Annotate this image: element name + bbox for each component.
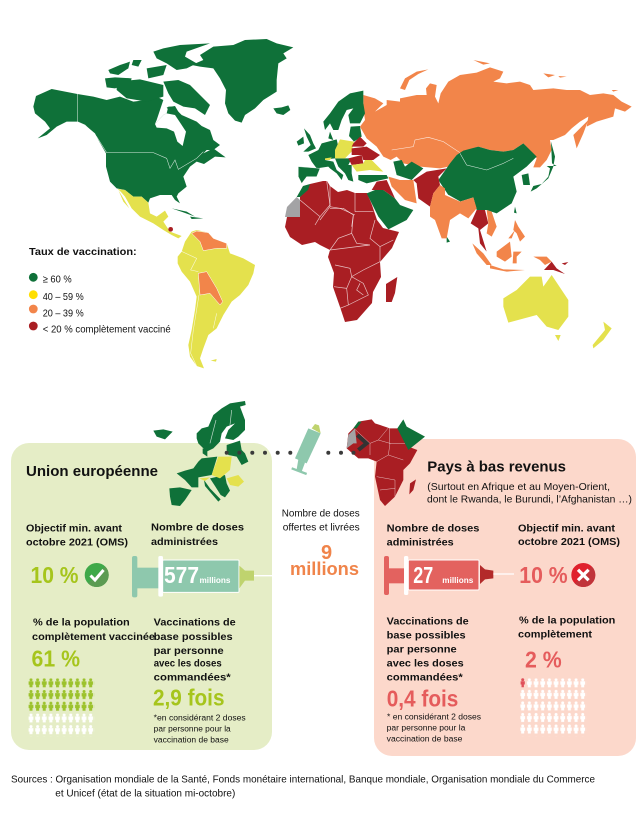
South America borders [180,251,217,366]
heading: Pays à bas revenus [427,459,566,476]
vaccinations label: commandées* [387,672,464,684]
legend [29,246,171,336]
Novaya Zemlya and islands [400,60,618,92]
vaccinations label: commandées* [154,672,232,684]
legend orange: 20 – 39 % [43,308,84,320]
vaccinations label [387,615,469,684]
world map [33,39,632,368]
Baltics and eastern EU [227,441,248,465]
population value: 2 % [525,646,562,672]
Iceland [153,429,173,439]
Levant and Iraq [372,180,395,198]
dotted connector [225,451,356,455]
Sakhalin [573,120,588,148]
syringe: 27 millions: millions [442,575,474,585]
Iberia [169,487,192,506]
syringe: 577 millions: millions [200,575,231,585]
population label: % de la population [519,615,615,627]
Scandinavia [197,401,246,452]
Hudson Bay [155,113,186,146]
legend green: ≥ 60 % [43,274,72,286]
population label: % de la population [33,617,130,629]
Falkland [211,359,217,362]
population label [32,617,155,643]
Cuba and Hispaniola [172,208,203,219]
legend title: Taux de vaccination: [29,246,137,258]
Italy and Balkans [325,158,353,182]
Morocco [353,422,362,428]
vaccinations label: base possibles [154,631,233,643]
Turkey [358,175,388,183]
legend red: < 20 % complètement vacciné [43,324,171,336]
region: Europe [297,91,388,183]
Morocco [297,184,310,197]
Russia and Kazakhstan [360,67,632,168]
Mongolia border [448,153,513,202]
Slovenia [325,157,332,160]
Belarus [352,137,367,147]
Russia border [392,137,460,153]
Mexico and Central America [118,189,182,238]
doses label: Nombre de doses [387,523,480,535]
Greenland [192,39,293,123]
Vietnam [487,210,497,237]
Romania [348,155,363,165]
Canada-US border and lakes [77,94,203,169]
vaccinations label: par personne [387,644,457,656]
objective label: Objectif min. avant [518,523,616,535]
Romania [227,475,244,487]
region: Africa [285,181,399,322]
legend yellow [29,290,84,303]
South America [178,230,255,368]
donated doses number: millions [290,559,359,579]
icon: check [85,563,109,587]
legend yellow: 40 – 59 % [43,291,84,303]
vaccinations label: Vaccinations de [154,617,236,629]
subheading: (Surtout en Afrique et au Moyen-Orient, [427,481,610,493]
population value: 61 % [32,646,80,672]
region: Europe and Asia [360,60,632,348]
EU content [26,463,273,745]
footnote: vaccination de base [154,736,229,745]
donated doses number [290,542,359,579]
objective label: octobre 2021 (OMS) [26,537,128,549]
Europe mini map [153,401,248,506]
Slovenia [199,477,210,481]
doses label: administrées [387,537,454,549]
objective label [518,523,620,548]
objective value: 10 % [30,562,78,588]
vaccinations label: Vaccinations de [387,615,469,627]
Bolivia and Paraguay [198,272,223,305]
subheading [427,481,632,506]
Africa [347,419,417,506]
United Kingdom and Ireland [297,128,316,152]
legend orange [29,305,84,320]
syringe: 577 millions [132,556,273,597]
sources: Sources : Organisation mondiale de la Santé, Fonds monétaire international, Banque mondiale, Organisation mondiale du Commerce [11,774,595,786]
donated doses number: 9 [321,542,332,564]
region: Americas [33,39,293,368]
Korea, Japan, Taiwan, Sri Lanka [447,142,557,243]
vaccinations value: 0,4 fois [387,686,458,712]
Iberia [298,167,320,183]
Tasmania and New Zealand [555,322,612,348]
people pictogram [28,678,95,737]
footnote: vaccination de base [387,735,463,744]
Africa continent [285,181,399,322]
footnote: * en considérant 2 doses [387,712,481,721]
population label: complètement vaccinée [32,631,155,643]
Baltics [349,126,362,142]
Italy and Balkans [204,475,230,502]
Madagascar [386,277,397,302]
footnote [154,714,246,745]
panel: Union européenne [11,443,272,750]
Scandinavia border [210,410,232,443]
Western Sahara [285,197,300,217]
sources: et Unicef (état de la situation mi-octobre) [55,788,235,800]
objective label: octobre 2021 (OMS) [518,536,620,548]
population label [518,615,615,641]
donated doses label: offertes et livrées [283,522,360,534]
Western Europe [177,457,217,487]
footnote: *en considérant 2 doses [154,714,246,723]
subheading: dont le Rwanda, le Burundi, l’Afghanistan …) [427,494,632,506]
China and Mongolia [438,143,537,213]
low-income content [384,459,632,744]
objective label: Objectif min. avant [26,523,123,535]
Western Sahara [347,428,357,448]
Australia [503,275,568,330]
Arabia [397,419,425,450]
Africa mini map [347,419,425,506]
vaccinations label [154,617,236,684]
Iran [388,177,417,203]
heading: Union européenne [26,463,158,480]
Iceland [273,105,290,115]
Venezuela and Guianas [192,231,227,251]
India [430,185,477,238]
vaccinations label: base possibles [387,629,466,641]
Denmark [328,132,333,140]
population label: complètement [518,629,593,641]
donated doses label: Nombre de doses [282,508,360,520]
footnote: par personne pour la [154,725,231,734]
sources [11,774,595,800]
objective value: 10 % [519,562,568,588]
icon: donated syringe [292,424,321,474]
doses label: Nombre de doses [151,522,244,534]
Poland [335,139,354,158]
Arabia [367,190,413,229]
Africa borders [320,181,393,308]
objective label [26,523,128,549]
doses label [151,522,244,548]
panel: Pays à bas revenus [374,439,636,756]
vaccinations label: avec les doses [154,658,222,670]
Africa borders [355,427,405,497]
Madagascar [409,479,416,494]
Arctic islands [105,43,210,115]
vaccinations label: avec les doses [387,658,464,670]
doses label: administrées [151,536,218,548]
syringe: 27 millions [384,556,514,595]
footnote: par personne pour la [387,724,466,733]
North America [33,89,226,203]
Bulgaria and Georgia [352,160,383,172]
Nicaragua dot [168,227,173,232]
people pictogram [520,678,587,736]
Indonesia and Philippines [472,220,552,272]
syringe: 27 millions: 27 [413,562,433,588]
doses label [387,523,480,549]
vaccinations label: par personne [154,645,224,657]
Poland [212,457,232,478]
legend green [29,273,72,286]
Ukraine [352,147,380,160]
Papua New Guinea [544,262,568,274]
vaccinations value: 2,9 fois [153,685,224,711]
donated doses label [282,508,360,534]
Myanmar and Thailand [471,210,488,252]
Denmark [203,448,207,457]
syringe: 577 millions: 577 [164,562,199,588]
arrow head [357,435,367,450]
Western Europe [308,139,338,168]
Scandinavia [323,91,365,130]
icon: cross [571,563,595,587]
Pakistan and Afghanistan [413,168,447,207]
footnote [387,712,481,744]
Central Asia [393,160,423,180]
